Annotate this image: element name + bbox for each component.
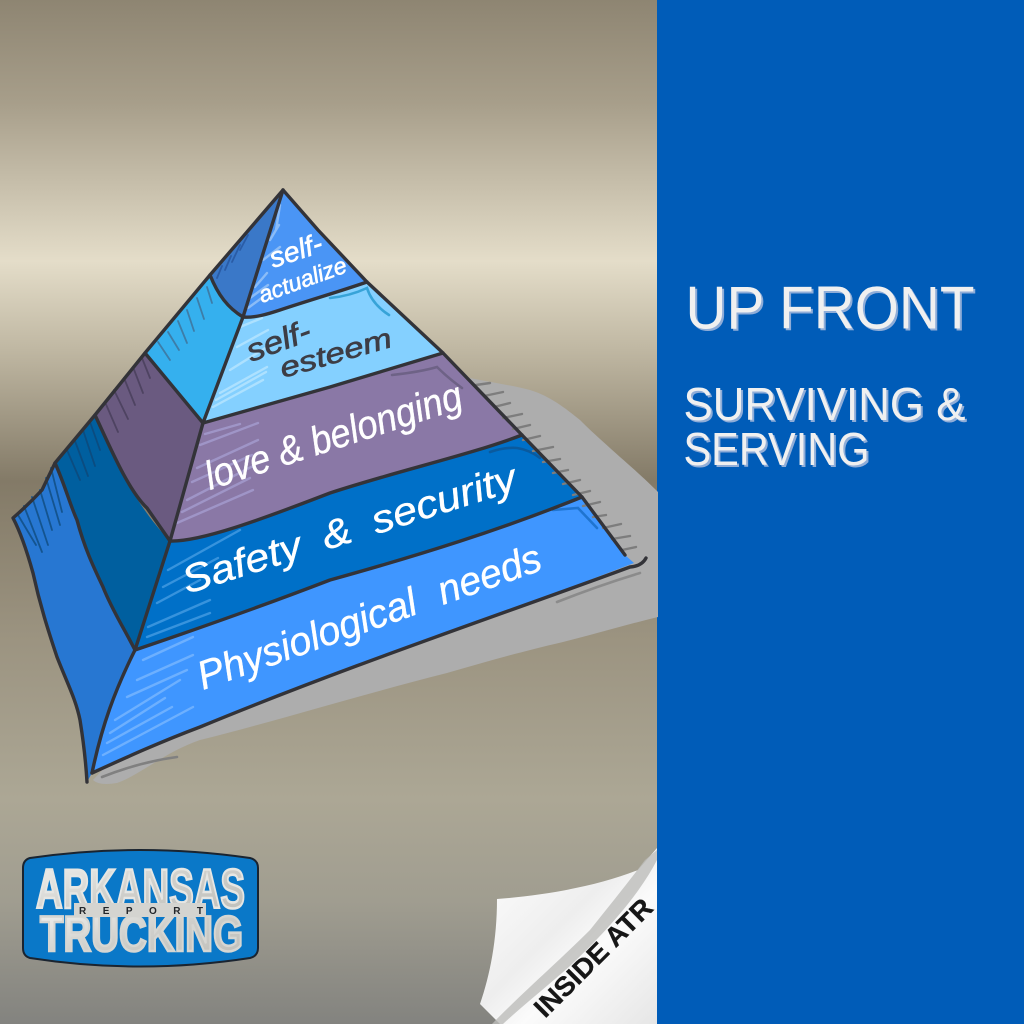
heading: Up Front: UP FRONT [688, 276, 976, 344]
tier: self-actualization [243, 190, 367, 317]
subheading: Surviving and Serving [684, 378, 968, 477]
curl fold shadow [492, 850, 657, 1024]
logo wordmark: Trucking: TRUCKING [40, 906, 243, 962]
background panel: beige metallic gradient [0, 0, 657, 1024]
logo: Arkansas Trucking Report [23, 850, 258, 966]
left face: safety and security [55, 415, 170, 650]
tier: physiological needs [92, 497, 634, 773]
label: self-esteem [241, 313, 395, 384]
pyramid drop shadow [93, 378, 658, 784]
left face dark hatching [18, 235, 248, 552]
tier corner shading marks [102, 288, 640, 777]
left face: self-actualization [210, 190, 283, 317]
heading: Up Front: UP FRONT [686, 274, 974, 342]
label: self-esteem: self- [241, 313, 315, 369]
left face tiers [13, 190, 283, 782]
label: safety and security: Safety & security [177, 456, 524, 603]
subheading: Surviving and Serving: SERVING [684, 423, 870, 475]
left face: love and belonging [95, 353, 203, 541]
left face: physiological [13, 463, 135, 782]
panel: blue title column [657, 0, 1024, 1024]
label: love and belonging: love & belonging [199, 374, 468, 499]
page curl corner [480, 848, 659, 1024]
logo badge [23, 850, 258, 966]
label: self-actualize [255, 228, 350, 308]
tier: love and belonging [170, 353, 522, 541]
right face tiers [92, 190, 634, 773]
logo wordmark: Report: REPORT [79, 906, 203, 917]
subheading: Surviving and Serving: SURVIVING & [684, 378, 966, 430]
pyramid outlines [13, 190, 646, 782]
curl tab label: Inside ATR: INSIDE ATR [528, 892, 659, 1023]
right face light hatching [103, 205, 280, 755]
subheading: Surviving and Serving: SERVING [686, 425, 872, 477]
subheading: Surviving and Serving: SURVIVING & [686, 380, 968, 432]
curled page sheet [480, 848, 657, 1024]
label: self-actualize: self- [265, 228, 326, 274]
logo report strip [74, 903, 206, 917]
pyramid illustration [13, 190, 646, 782]
tier: self-esteem [203, 282, 443, 423]
tier: safety and security [135, 435, 582, 650]
logo wordmark: Arkansas: ARKANSAS [36, 857, 245, 920]
left face: self-esteem [145, 275, 243, 423]
label: self-actualize: actualize [255, 252, 350, 308]
label: self-esteem: esteem [276, 322, 395, 384]
grey hatching along right edge [476, 383, 636, 550]
label: physiological needs: Physiological needs [191, 536, 547, 698]
